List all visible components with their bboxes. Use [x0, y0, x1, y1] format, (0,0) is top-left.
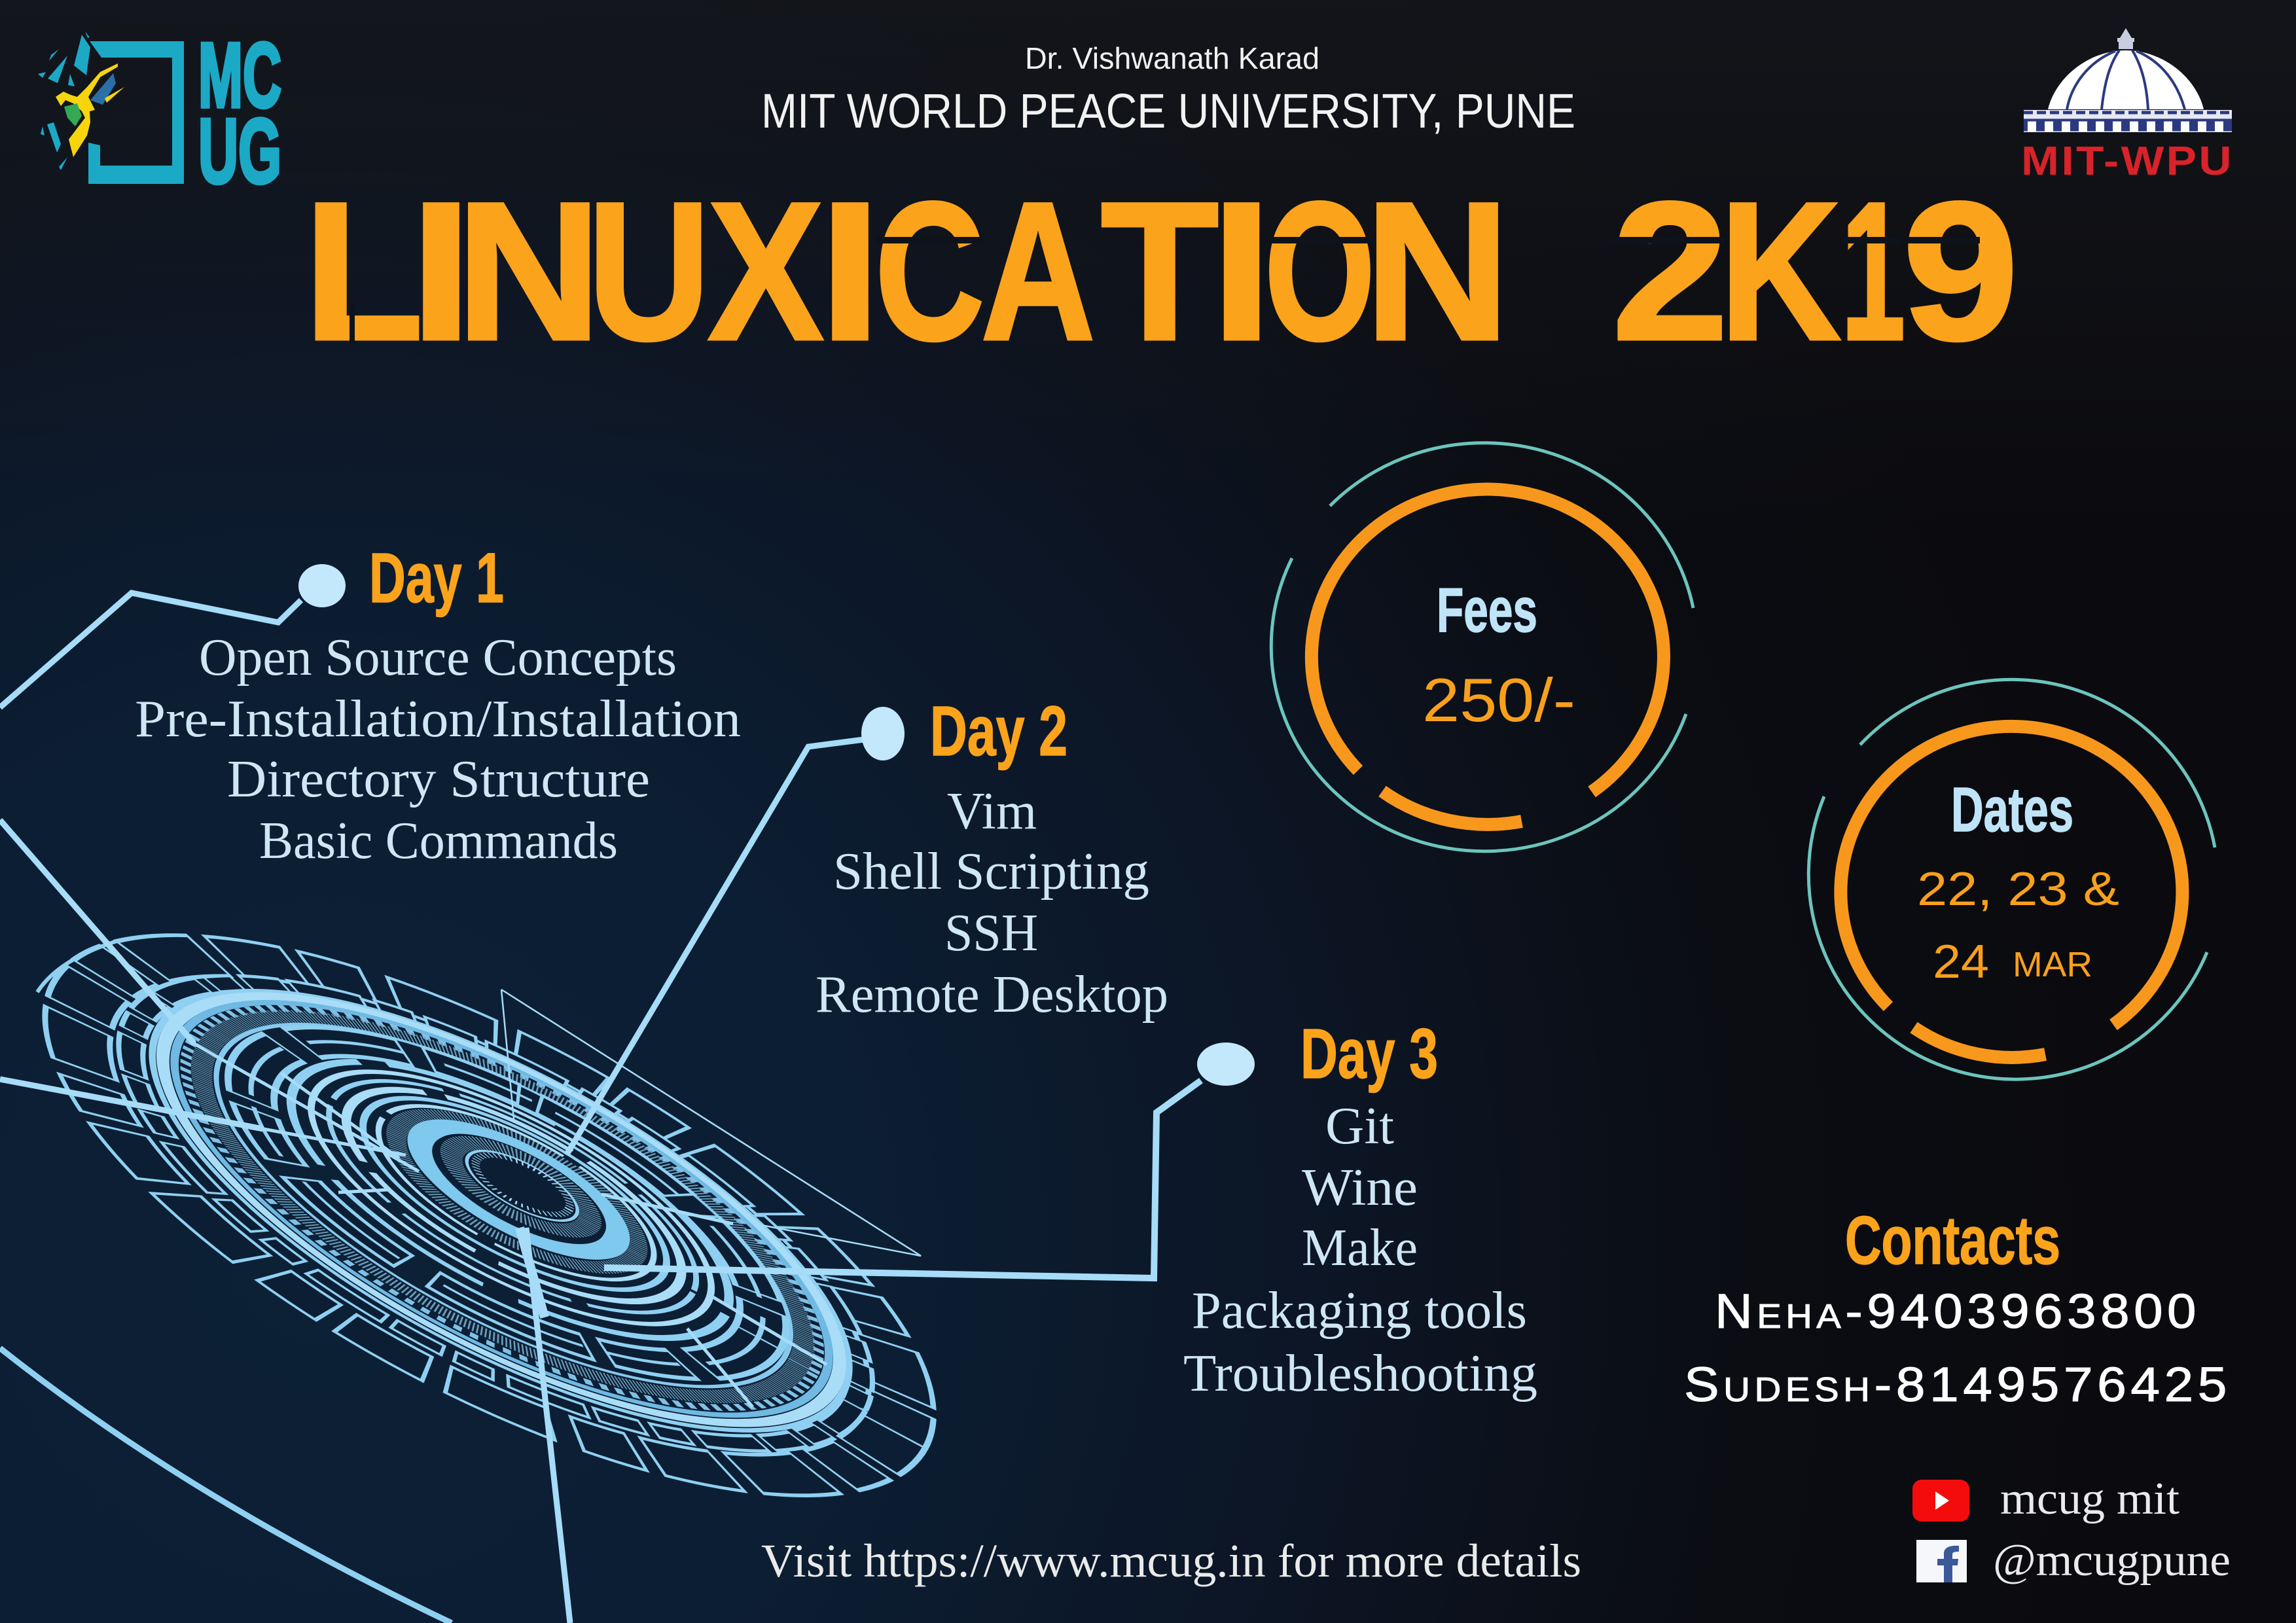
- connector: day 1 line: [0, 564, 346, 1044]
- day 1 topics: Basic Commands: [259, 812, 618, 870]
- day 3 topics: Git: [1325, 1097, 1394, 1155]
- tech disc illustration: [7, 855, 971, 1576]
- icon: MCUG logo: [38, 24, 281, 202]
- day 3 topics: Make: [1302, 1219, 1418, 1277]
- day 3 topics: Troubleshooting: [1183, 1345, 1537, 1402]
- fees amount: 250/-: [1422, 666, 1575, 734]
- logo bird wing: [90, 73, 116, 105]
- logo wordmark UG: UG: [198, 99, 281, 202]
- dome: [2048, 50, 2204, 109]
- title word: Linuxication: X: [708, 161, 824, 381]
- title word: 2K19: [1612, 161, 2018, 381]
- title word: Linuxication: I: [410, 161, 473, 381]
- dates line two: MAR: [2013, 945, 2092, 984]
- day 2 heading: Day 2: [930, 691, 1067, 770]
- dates line one: 22, 23 &: [1917, 863, 2119, 916]
- title word: 2K19: K: [1720, 161, 1840, 381]
- logo wordmark MC: MC: [198, 24, 281, 126]
- facebook handle: @mcugpune: [1993, 1535, 2231, 1586]
- panel: day 1: [135, 538, 741, 870]
- panel: day 2: [816, 691, 1168, 1024]
- day 2 topics: SSH: [944, 904, 1038, 962]
- day 1 heading: Day 1: [369, 538, 504, 617]
- title word: Linuxication: N: [1365, 161, 1510, 381]
- connector dot: day 3: [1197, 1043, 1255, 1086]
- icon: MIT-WPU logo: [2021, 28, 2234, 184]
- website note: Visit https://www.mcug.in for more details: [761, 1535, 1581, 1587]
- connector: day 2 line: [567, 707, 905, 1154]
- logo bird chest: [64, 103, 82, 126]
- connector: day 3 line: [604, 1043, 1255, 1278]
- panel: contacts: [1684, 1203, 2231, 1412]
- dates line two: [1933, 936, 2092, 988]
- university prefix: Dr. Vishwanath Karad: [1025, 41, 1319, 75]
- decorative beams: [0, 1079, 570, 1623]
- dates line two: 24: [1933, 936, 1989, 988]
- title word: Linuxication: [304, 161, 1510, 381]
- day 1 topics: [135, 629, 741, 870]
- day 3 topics: Wine: [1302, 1159, 1418, 1217]
- day 1 topics: Pre-Installation/Installation: [135, 690, 741, 748]
- title word: Linuxication: A: [981, 161, 1095, 381]
- fees label: Fees: [1437, 575, 1537, 645]
- logo bird body: [56, 63, 124, 157]
- contacts heading: Contacts: [1845, 1203, 2060, 1279]
- disc spokes and beams: [37, 940, 921, 1407]
- logo frame: [88, 41, 184, 184]
- title word: 2K19: 2: [1612, 161, 1729, 381]
- dates label: Dates: [1951, 775, 2073, 845]
- day 2 topics: [816, 783, 1168, 1024]
- fees rings: [1271, 443, 1693, 851]
- day 1 topics: Directory Structure: [227, 751, 650, 808]
- youtube handle: mcug mit: [2000, 1474, 2180, 1524]
- title word: Linuxication: I: [1211, 161, 1272, 381]
- dome ribs: [2067, 50, 2185, 109]
- title word: 2K19: 1: [1841, 161, 1905, 381]
- connector dot: day 2: [861, 707, 905, 760]
- day 2 topics: Remote Desktop: [816, 966, 1168, 1024]
- day 3 topics: Packaging tools: [1192, 1282, 1527, 1340]
- university name: [761, 41, 1575, 138]
- panel: day 3: [1183, 1014, 1537, 1402]
- icon: youtube: [1912, 1480, 1969, 1522]
- university title: MIT WORLD PEACE UNIVERSITY, PUNE: [761, 84, 1575, 138]
- title word: Linuxication: I: [819, 161, 882, 381]
- title word: Linuxication: T: [1101, 161, 1219, 381]
- dates rings: [1808, 679, 2215, 1079]
- title word: Linuxication: N: [456, 161, 601, 381]
- day 2 topics: Shell Scripting: [833, 843, 1149, 901]
- title word: Linuxication: L: [304, 161, 423, 381]
- day 2 topics: Vim: [947, 783, 1037, 840]
- icon: facebook: [1916, 1540, 1967, 1582]
- title word: Linuxication: U: [588, 161, 710, 381]
- day 1 topics: Open Source Concepts: [199, 629, 677, 687]
- title word: Linuxication: C: [875, 161, 984, 381]
- logo shards: [38, 31, 90, 170]
- day 3 topics: [1183, 1097, 1537, 1402]
- title word: Linuxication: O: [1265, 161, 1375, 381]
- social: youtube: [1912, 1474, 2180, 1524]
- panel: dates: [1808, 679, 2215, 1079]
- colonnade: [2024, 110, 2232, 132]
- title word: 2K19: 9: [1903, 161, 2018, 381]
- title: [304, 161, 2018, 381]
- dome lantern: [2117, 28, 2134, 49]
- MIT-WPU wordmark: MIT-WPU: [2021, 139, 2234, 184]
- contact: Sudesh: Sudesh-8149576425: [1684, 1357, 2231, 1412]
- day 3 heading: Day 3: [1300, 1014, 1438, 1093]
- panel: fees: [1271, 443, 1693, 851]
- social: facebook: [1916, 1535, 2231, 1586]
- connector dot: day 1: [298, 564, 346, 607]
- disc rings: [7, 855, 971, 1576]
- contact: Neha: Neha-9403963800: [1715, 1284, 2200, 1338]
